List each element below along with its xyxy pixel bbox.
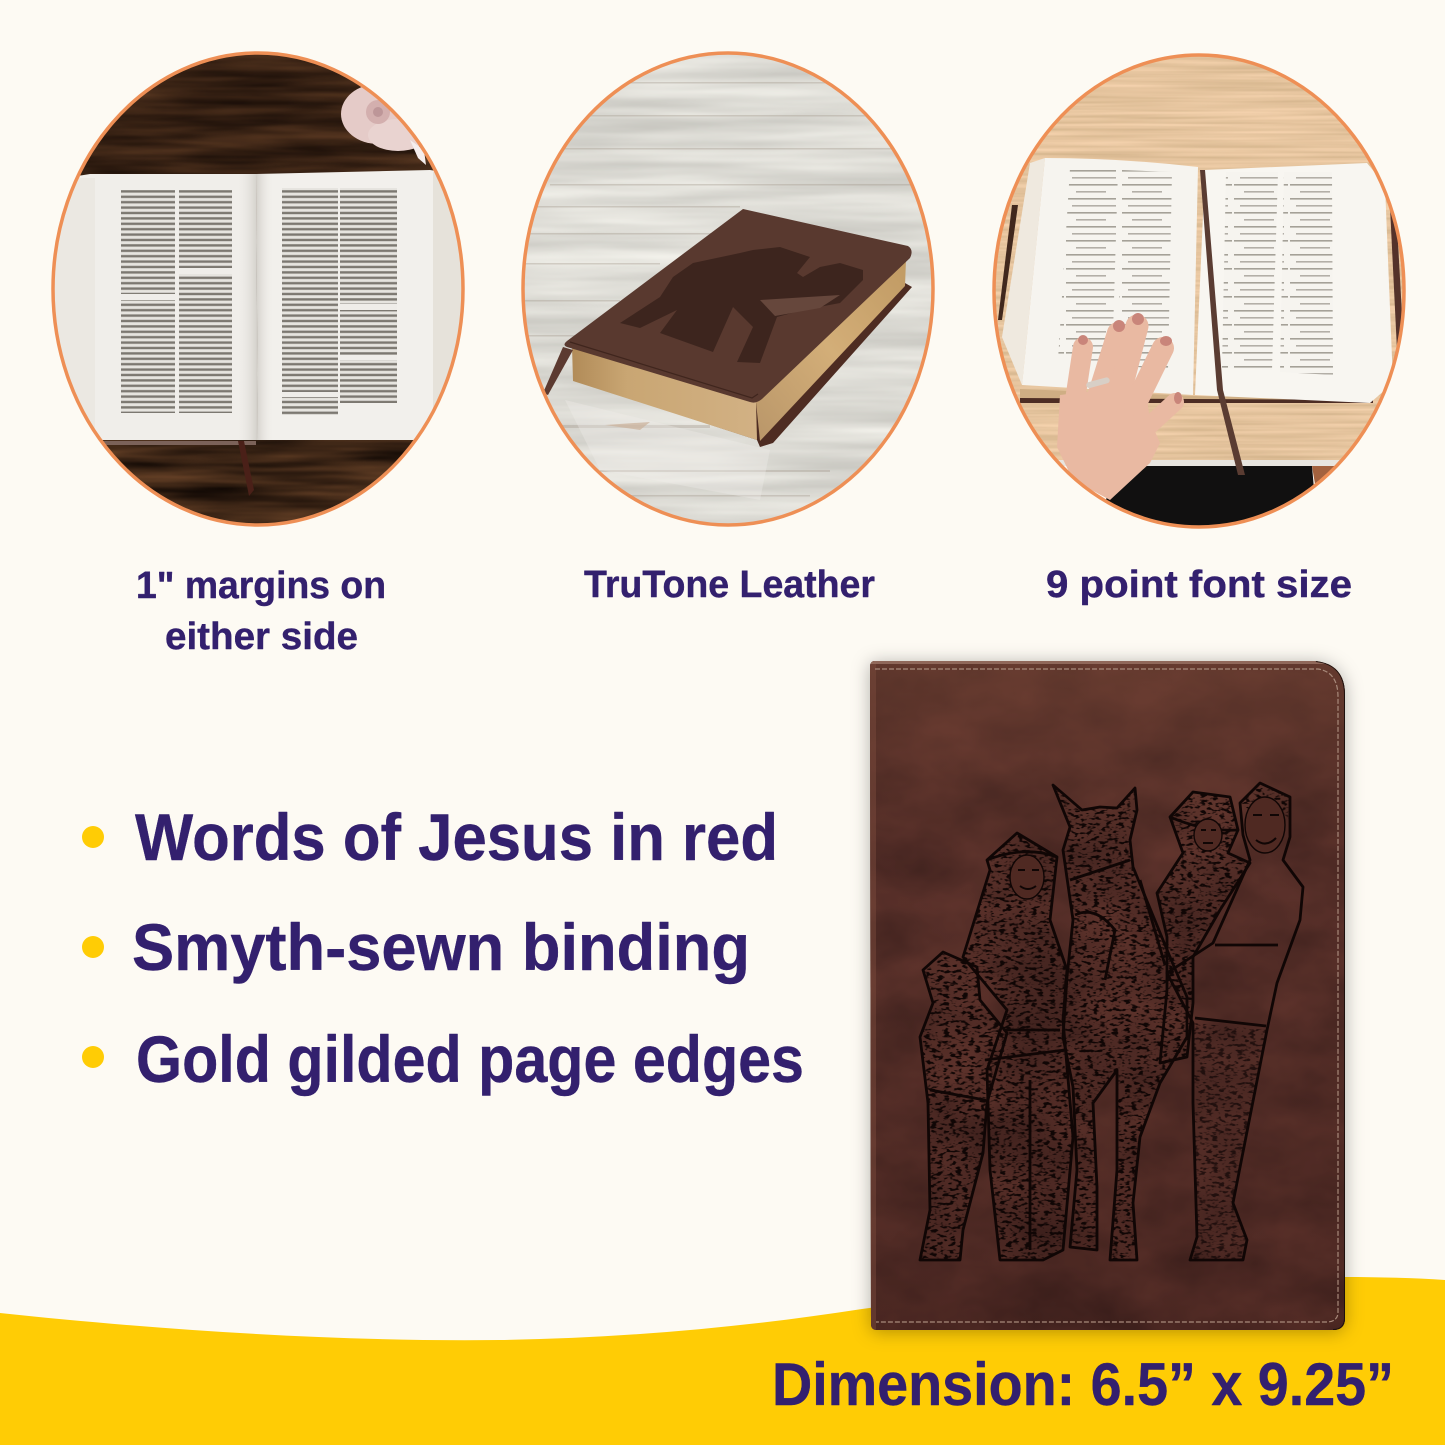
ribbon bbox=[543, 347, 573, 395]
faces bbox=[1010, 797, 1285, 899]
bullet: words of jesus: Words of Jesus in red bbox=[135, 800, 778, 874]
white shelf and black clothing bbox=[1058, 460, 1340, 466]
dimension label: Dimension: 6.5” x 9.25” bbox=[772, 1351, 1394, 1418]
bullet: page edges: Gold gilded page edges bbox=[136, 1022, 804, 1096]
icon: pink rose bbox=[341, 84, 428, 165]
gold page edge side bbox=[756, 260, 906, 441]
panel: photo of closed leather bible on wood bbox=[520, 50, 940, 530]
figure outlines bbox=[920, 783, 1303, 1260]
back cover bbox=[704, 283, 912, 447]
leather cover bbox=[564, 209, 912, 403]
speckled figure shading bbox=[920, 783, 1290, 1260]
panel: photo of open bible with margins bbox=[40, 50, 470, 530]
panel: leather bible cover bbox=[870, 661, 1346, 1331]
panel: photo of hand on open bible bbox=[990, 50, 1410, 536]
ribbon bbox=[1200, 170, 1245, 475]
yellow wave footer bbox=[0, 1277, 1445, 1445]
icon: engraved portrait of family with horse bbox=[920, 783, 1303, 1260]
caption: leather: TruTone Leather bbox=[584, 564, 875, 606]
book cover sides bbox=[998, 205, 1018, 320]
left page edge bbox=[1002, 158, 1045, 385]
circle outline 1 bbox=[53, 53, 463, 525]
right page bbox=[256, 170, 434, 440]
right page bbox=[1195, 163, 1393, 403]
facial features bbox=[1018, 815, 1279, 889]
icon: engraved family on small cover bbox=[620, 247, 863, 363]
caption: margins bbox=[136, 565, 386, 658]
circle outline 2 bbox=[523, 53, 933, 525]
circle outline 3 bbox=[994, 55, 1404, 527]
bible text columns bbox=[121, 188, 397, 415]
gold page edge front bbox=[572, 346, 757, 440]
left page bbox=[1022, 158, 1198, 395]
caption: font size: 9 point font size bbox=[1046, 564, 1352, 606]
left page bbox=[79, 174, 258, 440]
bible text columns bbox=[1058, 168, 1118, 365]
caption: margins: 1" margins on bbox=[136, 565, 386, 607]
ribbon bbox=[238, 441, 254, 496]
caption: margins: either side bbox=[165, 616, 358, 658]
icon: hand bbox=[1057, 313, 1182, 500]
bullet list bbox=[82, 800, 804, 1096]
white reflection bbox=[565, 400, 770, 500]
bullet: binding: Smyth-sewn binding bbox=[132, 910, 750, 984]
